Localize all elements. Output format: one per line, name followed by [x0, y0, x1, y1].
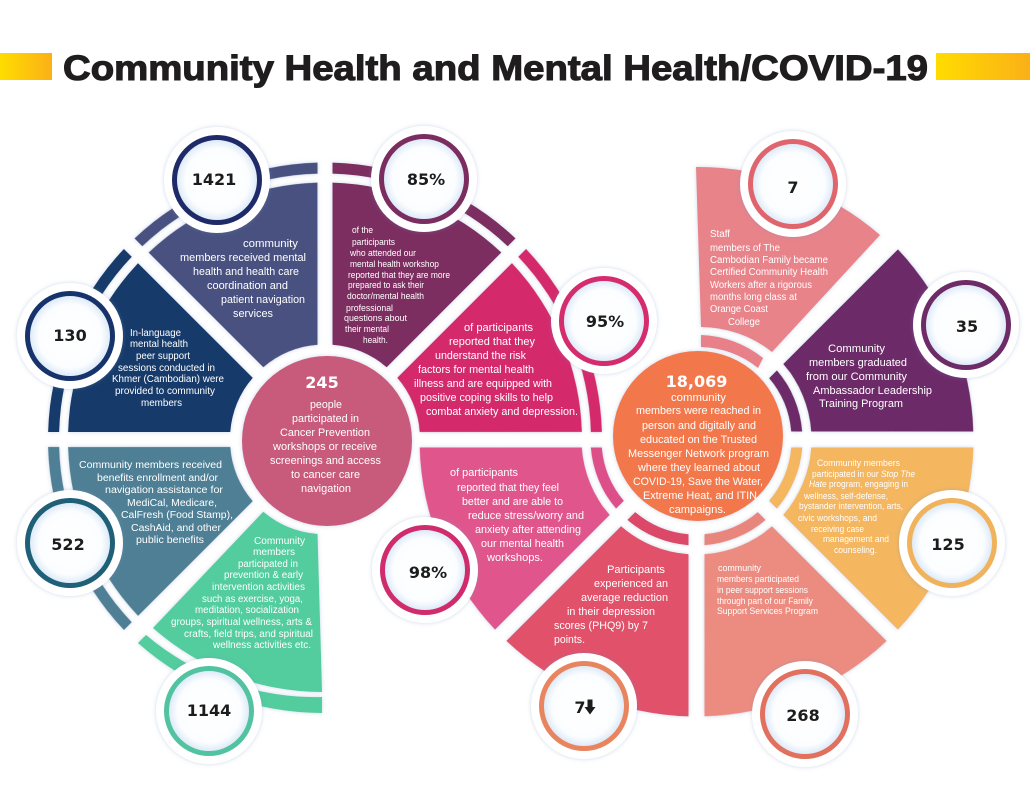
description text: members were reached in	[636, 405, 761, 417]
description text: groups, spiritual wellness, arts &	[171, 617, 312, 628]
description text: doctor/mental health	[347, 291, 424, 301]
panel: 1144 prevention and early intervention	[138, 512, 322, 713]
badge: 130: 130	[53, 326, 87, 345]
description text: Orange Coast	[710, 304, 768, 315]
description text	[344, 225, 450, 345]
badge: 130	[17, 283, 123, 389]
description text	[554, 564, 668, 646]
description text	[628, 392, 769, 516]
description text: Cancer Prevention	[280, 427, 370, 439]
description text: Workers after a rigorous	[710, 280, 812, 291]
description text	[79, 460, 233, 546]
description text: of participants	[464, 322, 534, 334]
description text: counseling.	[834, 545, 877, 555]
description text: professional	[346, 303, 393, 313]
description text: meditation, socialization	[195, 605, 299, 616]
description text: services	[233, 308, 273, 320]
description text	[798, 458, 915, 555]
description text: members	[141, 398, 182, 409]
panel: 85% prepared to ask doctor	[332, 163, 516, 367]
description text: understand the risk	[435, 350, 526, 362]
description text: prevention & early	[224, 570, 303, 581]
badge: 35	[913, 272, 1019, 378]
description text: mental health	[130, 339, 188, 350]
description text: person and digitally and	[642, 420, 756, 432]
description text	[270, 399, 381, 495]
description text: factors for mental health	[418, 364, 534, 376]
description text: Messenger Network program	[628, 448, 769, 460]
segment shape	[149, 133, 399, 383]
outer arc band	[135, 109, 323, 298]
badge: 85%	[371, 126, 477, 232]
badge: 1421: 1421	[192, 170, 236, 189]
description text: prepared to ask their	[348, 280, 424, 290]
segment shape	[366, 366, 629, 630]
description text: combat anxiety and depression.	[426, 406, 578, 418]
description text: public benefits	[136, 535, 204, 546]
description text: reduce stress/worry and	[468, 510, 584, 522]
description text: illness and are equipped with	[414, 378, 552, 390]
description text: bystander intervention, arts,	[799, 501, 903, 511]
description text	[180, 238, 306, 320]
description text	[717, 563, 818, 616]
left yellow title bar	[0, 53, 52, 80]
description text: Cambodian Family became	[710, 255, 828, 266]
panel: 95% understand the risk factors	[381, 249, 656, 513]
badge: 7	[740, 131, 846, 237]
segment shape	[19, 366, 269, 616]
description text: in peer support sessions	[717, 585, 808, 595]
outer arc band	[332, 163, 516, 246]
badge: 1144: 1144	[187, 701, 231, 720]
description text: community	[243, 238, 299, 250]
description text: who attended our	[349, 248, 416, 258]
inner arc band	[573, 442, 640, 509]
description text: participants	[352, 237, 395, 247]
description text: members	[253, 547, 295, 558]
description text: reported that they	[449, 336, 535, 348]
badge: 1421	[164, 127, 270, 233]
description text: educated on the Trusted	[640, 434, 757, 446]
description text: Community members	[817, 458, 900, 468]
description text: their mental	[345, 324, 389, 334]
description text: community	[718, 563, 761, 573]
badge: 268: 268	[786, 706, 820, 725]
description text: benefits enrollment and/or	[97, 473, 219, 484]
description text: positive coping skills to help	[420, 392, 553, 404]
description text: in their depression	[567, 606, 655, 618]
inner arc band	[699, 496, 766, 563]
number 245: 245	[305, 373, 339, 392]
panel: 125 Stop The Hate program	[769, 448, 973, 630]
description text: Support Services Program	[717, 606, 818, 616]
number 18,069: 18,069	[666, 372, 727, 391]
description text	[414, 322, 578, 418]
inner arc band	[769, 448, 802, 509]
description text: participated in	[292, 413, 359, 425]
description text: members graduated	[809, 357, 907, 369]
description text: members of The	[710, 243, 780, 254]
description text: wellness activities etc.	[212, 640, 311, 651]
description text	[710, 229, 828, 328]
description text: reported that they feel	[457, 482, 559, 494]
description text: months long class at	[710, 292, 797, 303]
title: Community Health and Mental Health/COVID-19	[63, 49, 928, 88]
description text: through part of our Family	[717, 596, 813, 606]
description text: Extreme Heat, and ITIN	[643, 490, 757, 502]
inner arc band	[701, 335, 763, 368]
segment shape	[68, 263, 253, 432]
badge: 95%: 95%	[586, 312, 624, 331]
description text: members participated	[717, 574, 799, 584]
description text: CashAid, and other	[131, 523, 222, 534]
description text: MediCal, Medicare,	[127, 498, 217, 509]
description text	[171, 536, 313, 651]
panel: 1421 care coordination	[135, 109, 399, 383]
description text: from our Community	[806, 371, 907, 383]
description text: health and health care	[193, 266, 299, 278]
right yellow title bar	[936, 53, 1030, 80]
description text: crafts, field trips, and spiritual	[184, 629, 313, 640]
segment shape	[153, 512, 322, 692]
center circle: 245 cancer prevention	[242, 356, 412, 526]
description text: workshops or receive	[272, 441, 377, 453]
description text: Community members received	[79, 460, 222, 471]
description text	[112, 328, 224, 409]
segment shape	[506, 526, 688, 716]
description text: Khmer (Cambodian) were	[112, 374, 224, 385]
description text: participated in our Stop The	[812, 469, 915, 479]
description text: intervention activities	[212, 582, 305, 593]
description text: where they learned about	[637, 462, 760, 474]
description text: questions about	[344, 313, 407, 323]
description text: mental health workshop	[350, 259, 439, 269]
segment shape	[332, 183, 501, 367]
badge: 522: 522	[51, 535, 85, 554]
description text: health.	[363, 335, 388, 345]
badge: 95%	[551, 268, 657, 374]
description text: Training Program	[819, 398, 903, 410]
badge: 125: 125	[931, 535, 965, 554]
badge: 7 with down arrow: 7	[574, 698, 586, 717]
panel: 35 ambassador leadership graduates	[753, 249, 1027, 513]
circle shape	[242, 356, 412, 526]
badge: 522	[17, 490, 123, 596]
segment shape	[381, 263, 631, 513]
description text: patient navigation	[221, 294, 305, 306]
center circle: 18,069 trusted messenger network	[613, 351, 783, 521]
description text: Community	[828, 343, 886, 355]
circle shape	[613, 351, 783, 521]
description text: screenings and access	[270, 455, 381, 467]
description text	[806, 343, 932, 410]
panel: 130 peer support sessions	[48, 249, 253, 432]
badge: 7: 7	[787, 178, 799, 197]
badge: 98%: 98%	[409, 563, 447, 582]
description text: average reduction	[581, 592, 668, 604]
description text: provided to community	[115, 386, 215, 397]
outer arc band	[467, 249, 656, 438]
panel: 522 benefits enrollment	[0, 366, 269, 630]
description text	[450, 467, 584, 564]
description text: sessions conducted in	[118, 363, 215, 374]
inner arc band	[627, 512, 688, 545]
segment shape	[696, 167, 880, 352]
description text: points.	[554, 634, 585, 646]
description text: receiving case	[811, 524, 864, 534]
description text: such as exercise, yoga,	[202, 594, 303, 605]
outer arc band	[48, 249, 132, 432]
description text: of participants	[450, 467, 518, 479]
badge: 268	[752, 661, 858, 767]
panel: 7 certified community health workers	[696, 167, 880, 368]
description text: Staff	[710, 229, 730, 240]
description text: people	[310, 399, 342, 411]
description text: Certified Community Health	[710, 267, 828, 278]
description text: campaigns.	[669, 504, 726, 516]
description text: navigation	[301, 483, 351, 495]
description text: Participants	[607, 564, 665, 576]
description text: our mental health	[481, 538, 564, 550]
badge: 35: 35	[956, 317, 978, 336]
description text: scores (PHQ9) by 7	[554, 620, 648, 632]
outer arc band	[0, 441, 183, 630]
description text: civic workshops, and	[798, 513, 877, 523]
description text: wellness, self-defense,	[803, 491, 888, 501]
description text: Community	[254, 536, 305, 547]
description text: members received mental	[180, 252, 306, 264]
panel: 98% feel better	[366, 366, 640, 630]
description text: peer support	[136, 351, 190, 362]
description text: Ambassador Leadership	[813, 385, 932, 397]
description text: In-language	[130, 328, 181, 339]
description text: Hate program, engaging in	[809, 479, 908, 489]
description text: reported that they are more	[348, 270, 450, 280]
description text: CalFresh (Food Stamp),	[121, 510, 233, 521]
description text: navigation assistance for	[105, 485, 224, 496]
segment shape	[764, 249, 1027, 513]
panel: 7 point PHQ9 reduction	[506, 512, 688, 716]
description text: management and	[823, 534, 889, 544]
outer arc band	[138, 635, 322, 713]
segment shape	[783, 448, 973, 630]
segment shape	[623, 507, 887, 770]
description text: College	[728, 317, 760, 328]
description text: better and are able to	[462, 496, 563, 508]
description text: COVID-19, Save the Water,	[633, 476, 763, 488]
panel: 268 family support services	[623, 496, 887, 770]
badge: 1144	[156, 658, 262, 764]
badge: 85%: 85%	[407, 170, 445, 189]
description text: experienced an	[594, 578, 668, 590]
description text: community	[671, 392, 727, 404]
badge: 125	[899, 490, 1005, 596]
description text: anxiety after attending	[475, 524, 581, 536]
inner arc band	[753, 370, 820, 437]
badge: 98%	[372, 517, 478, 623]
description text: of the	[352, 225, 373, 235]
badge: 7 with down arrow	[531, 653, 637, 759]
description text: workshops.	[486, 552, 543, 564]
description text: to cancer care	[291, 469, 360, 481]
description text: participated in	[238, 559, 298, 570]
description text: coordination and	[207, 280, 288, 292]
